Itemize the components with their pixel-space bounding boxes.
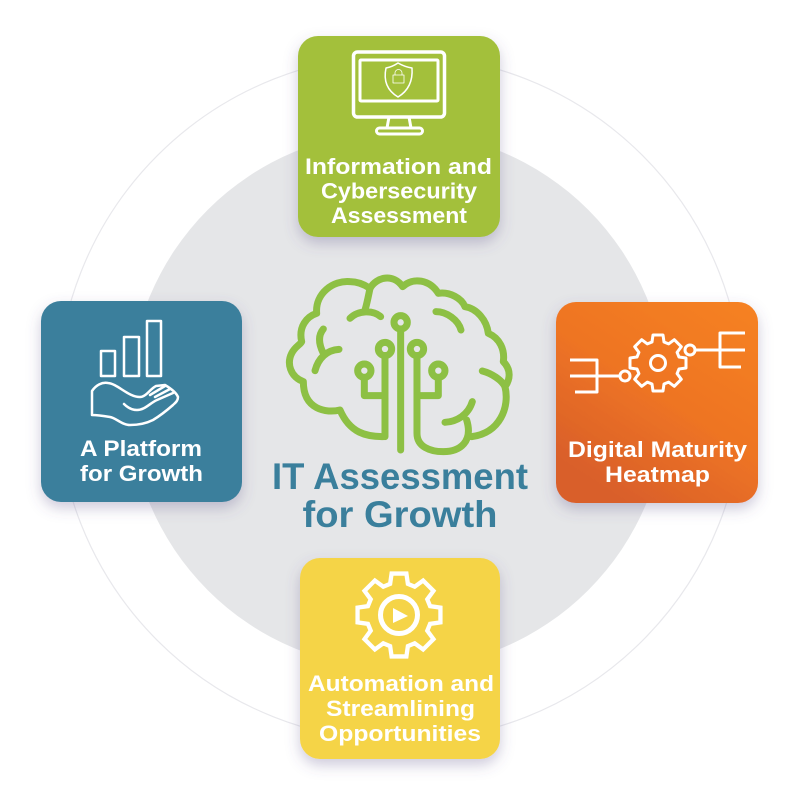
label: Information and [305,154,492,179]
panel: A Platform for Growth [41,301,242,502]
icon: gear with play button [358,574,440,656]
central grey disc [129,131,667,669]
label: A Platform [80,436,202,461]
outer ring [57,55,743,741]
title: for Growth [302,494,498,535]
label: Digital Maturity [568,437,748,462]
icon: hand with bar chart [92,321,178,425]
label [568,437,748,487]
label: for Growth [80,461,203,486]
icon: gear with connectors [570,333,745,392]
panel: Digital Maturity Heatmap [556,302,758,503]
title [272,456,528,535]
label: Opportunities [319,721,481,746]
label: Cybersecurity [321,178,478,204]
icon: brain with circuit [289,278,509,452]
label: Assessment [331,203,468,228]
title: IT Assessment [272,456,528,497]
label [305,154,492,228]
label [80,436,203,486]
panel: Automation and Streamlining Opportunities [300,558,500,759]
label: Streamlining [326,696,475,721]
panel: Information and Cybersecurity Assessment [298,36,500,237]
label: Automation and [308,671,494,696]
icon: monitor with shield [354,52,444,134]
label [308,671,494,746]
label: Heatmap [605,462,710,487]
